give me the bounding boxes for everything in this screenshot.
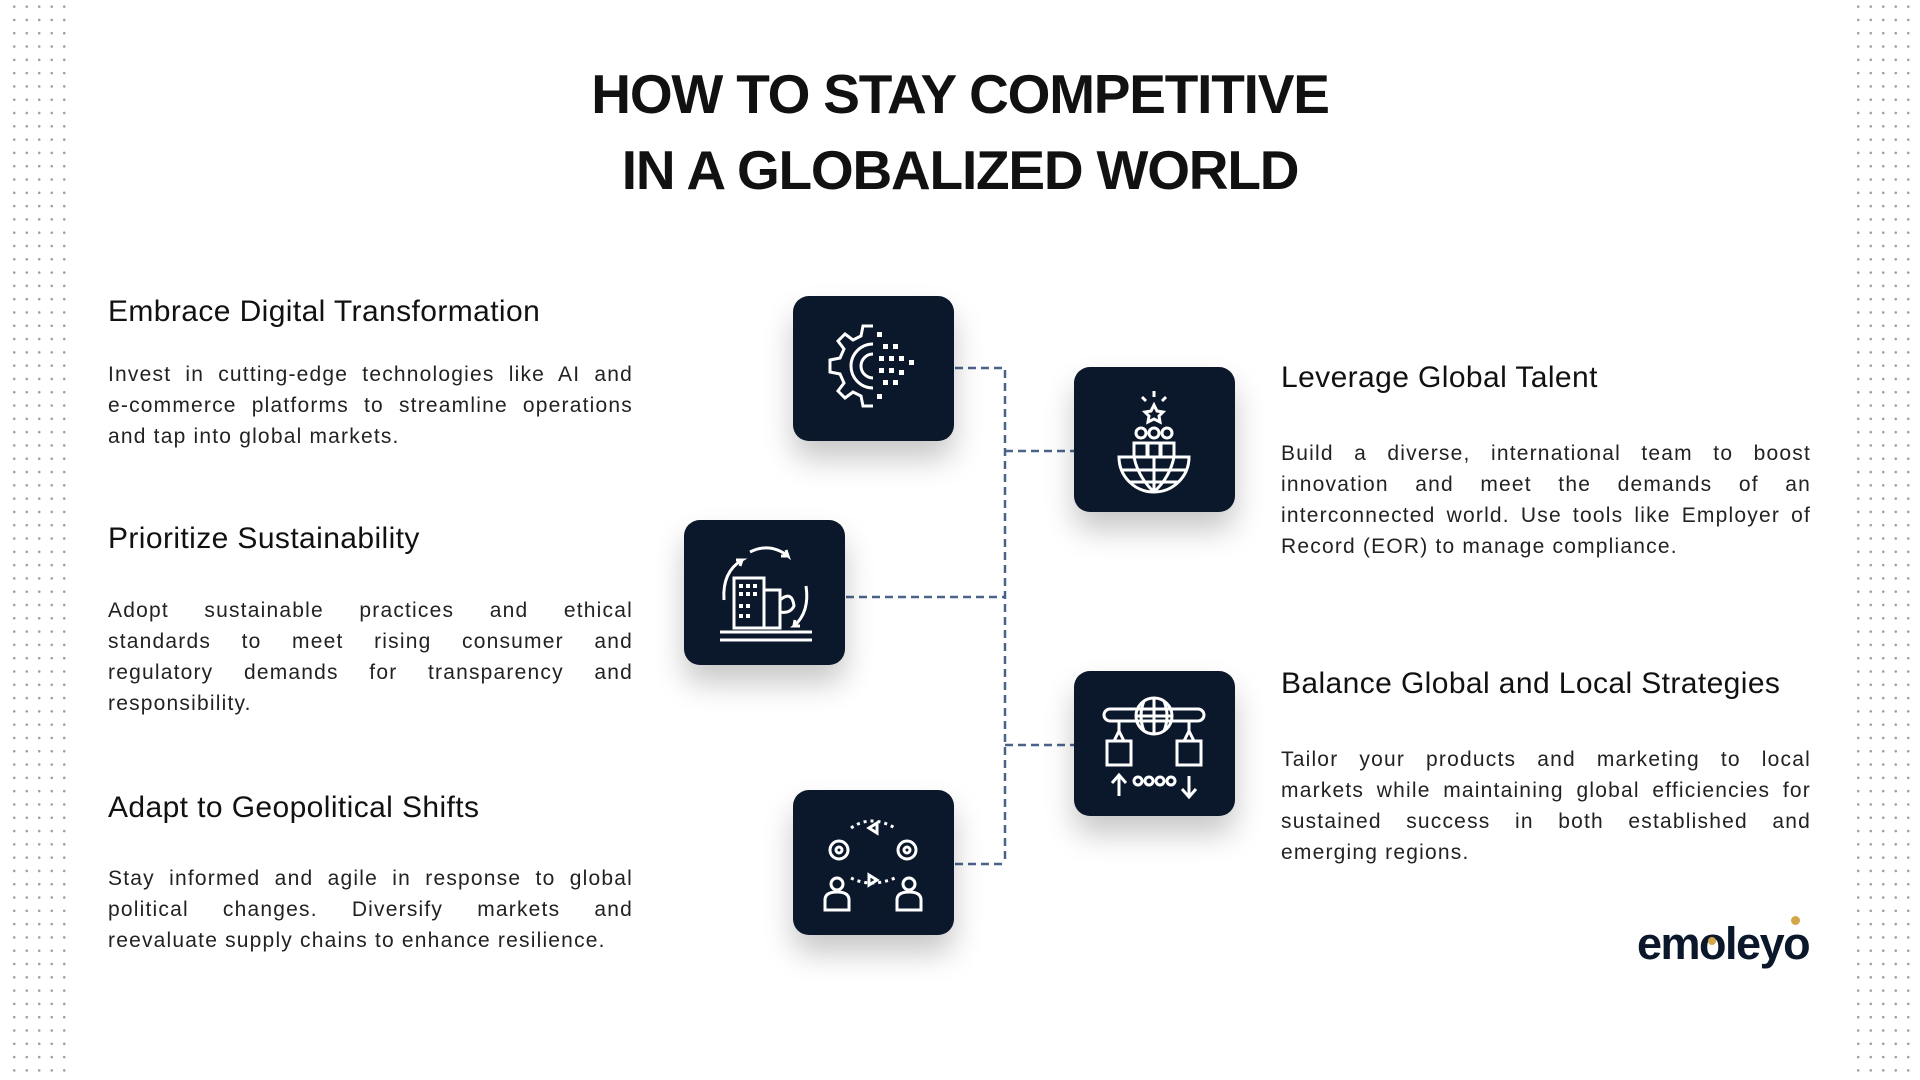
- logo: o: [1699, 918, 1725, 969]
- title: [591, 63, 1329, 201]
- text: sustainability: responsibility.: [108, 692, 252, 715]
- title: IN A GLOBALIZED WORLD: [622, 139, 1298, 201]
- logo: o: [1783, 918, 1809, 969]
- heading: balance: Balance Global and Local Strategies: [1281, 667, 1780, 700]
- icon: global talent: [1074, 367, 1235, 512]
- text: sustainability: standards to meet rising consumer and: [108, 630, 633, 653]
- title: HOW TO STAY COMPETITIVE: [591, 63, 1329, 125]
- heading: digital: Embrace Digital Transformation: [108, 295, 540, 328]
- icon: sustainability: [684, 520, 845, 665]
- heading: sustainability: Prioritize Sustainability: [108, 522, 420, 555]
- text: digital: Invest in cutting-edge technologies like AI and e‑commerce platforms to streamline operations and tap into global markets.: [108, 363, 633, 448]
- text: balance: Tailor your products and marketing to local markets while maintaining global efficiencies for sustained success in both established and emerging regions.: [1281, 748, 1811, 864]
- icon: balance global local: [1074, 671, 1235, 816]
- icon: geopolitical: [793, 790, 954, 935]
- text: talent: Build a diverse, international team to boost innovation and meet the demands of an interconnected world. Use tools like Employer of Record (EOR) to manage compliance.: [1281, 442, 1811, 558]
- text: sustainability: [108, 599, 633, 715]
- heading: geopolitical: Adapt to Geopolitical Shifts: [108, 791, 479, 824]
- logo: em ley: [1637, 918, 1783, 969]
- text: sustainability: Adopt sustainable practices and ethical: [108, 599, 633, 622]
- text: geopolitical: Stay informed and agile in response to global political changes. Diversify markets and reevaluate supply chains to enhance resilience.: [108, 867, 633, 952]
- heading: talent: Leverage Global Talent: [1281, 361, 1598, 394]
- text: sustainability: regulatory demands for transparency and: [108, 661, 633, 684]
- icon: gear digital: [793, 296, 954, 441]
